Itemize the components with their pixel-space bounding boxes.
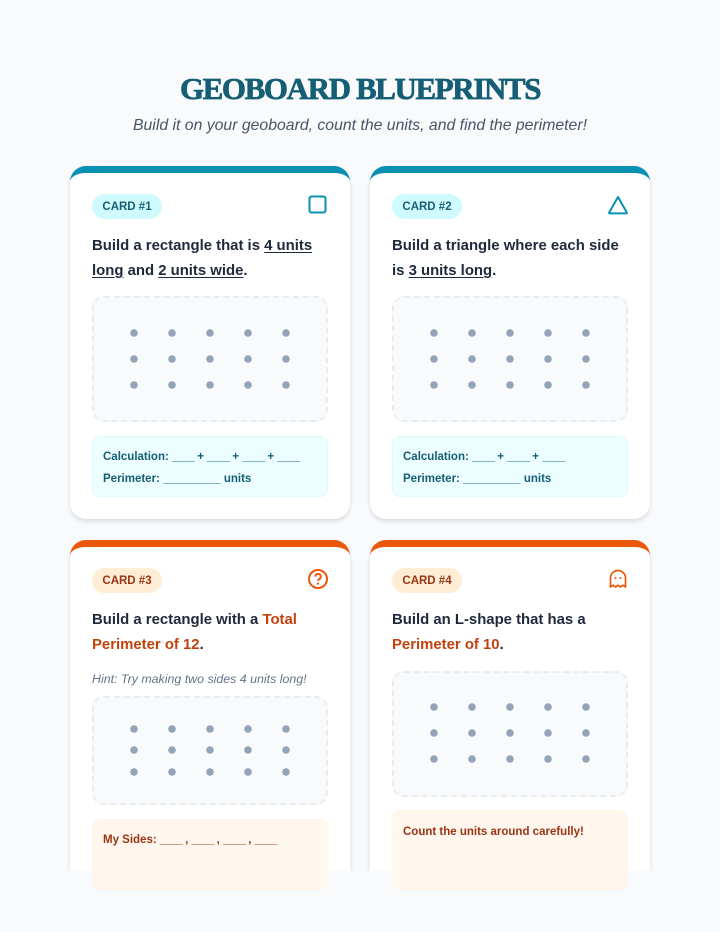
panel: card 2 bbox=[370, 166, 650, 519]
title: GEOBOARD BLUEPRINTS bbox=[180, 71, 540, 106]
calculation panel bbox=[392, 436, 628, 497]
question text: Build a rectangle with a Total bbox=[92, 612, 297, 628]
badge: card 2: CARD #2 bbox=[402, 201, 452, 213]
calculation panel: Perimeter: _________ units bbox=[403, 473, 551, 485]
hint panel: card 4: Count the units around carefully! bbox=[403, 826, 584, 838]
geoboard grid bbox=[392, 296, 628, 422]
icon: triangle bbox=[608, 196, 628, 214]
hint text: Hint: Try making two sides 4 units long! bbox=[92, 672, 307, 686]
badge: card 1: CARD #1 bbox=[102, 201, 152, 213]
badge: card 4 bbox=[392, 568, 462, 593]
question text: long and 2 units wide. bbox=[92, 263, 248, 279]
badge: card 3 bbox=[92, 568, 162, 593]
badge: card 3: CARD #3 bbox=[102, 575, 152, 587]
question text bbox=[92, 238, 312, 279]
question text: Build a triangle where each side bbox=[392, 238, 619, 254]
answer panel: card 3: My Sides: ____ , ____ , ____ , ____ bbox=[103, 834, 277, 846]
question text: Perimeter of 12. bbox=[92, 637, 204, 653]
geoboard grid bbox=[92, 296, 328, 422]
answer panel: card 3 bbox=[92, 819, 328, 890]
calculation panel bbox=[92, 436, 328, 497]
hint panel: card 4 bbox=[392, 810, 628, 890]
icon: question mark circle bbox=[308, 569, 328, 589]
panel: card 3 bbox=[70, 540, 350, 871]
question text: Build a rectangle that is 4 units bbox=[92, 238, 312, 254]
question text: Build an L-shape that has a bbox=[392, 612, 586, 628]
icon: ghost bbox=[610, 570, 626, 588]
panel: card 1 bbox=[70, 166, 350, 519]
calculation panel: Calculation: ____ + ____ + ____ + ____ bbox=[103, 451, 299, 463]
subtitle: Build it on your geoboard, count the units, and find the perimeter! bbox=[133, 117, 587, 134]
question text bbox=[93, 613, 296, 649]
badge: card 2 bbox=[392, 194, 462, 219]
calculation panel: Calculation: ____ + ____ + ____ bbox=[403, 451, 564, 463]
question text bbox=[393, 613, 586, 649]
panel: card 4 bbox=[370, 540, 650, 871]
icon: square bbox=[308, 196, 326, 214]
calculation panel: Perimeter: _________ units bbox=[103, 473, 251, 485]
question text: Perimeter of 10. bbox=[392, 637, 504, 653]
badge: card 1 bbox=[92, 194, 162, 219]
geoboard grid bbox=[392, 671, 628, 797]
badge: card 4: CARD #4 bbox=[402, 575, 452, 587]
question text: is 3 units long. bbox=[392, 263, 496, 279]
question text bbox=[392, 238, 619, 279]
geoboard grid bbox=[92, 696, 328, 805]
